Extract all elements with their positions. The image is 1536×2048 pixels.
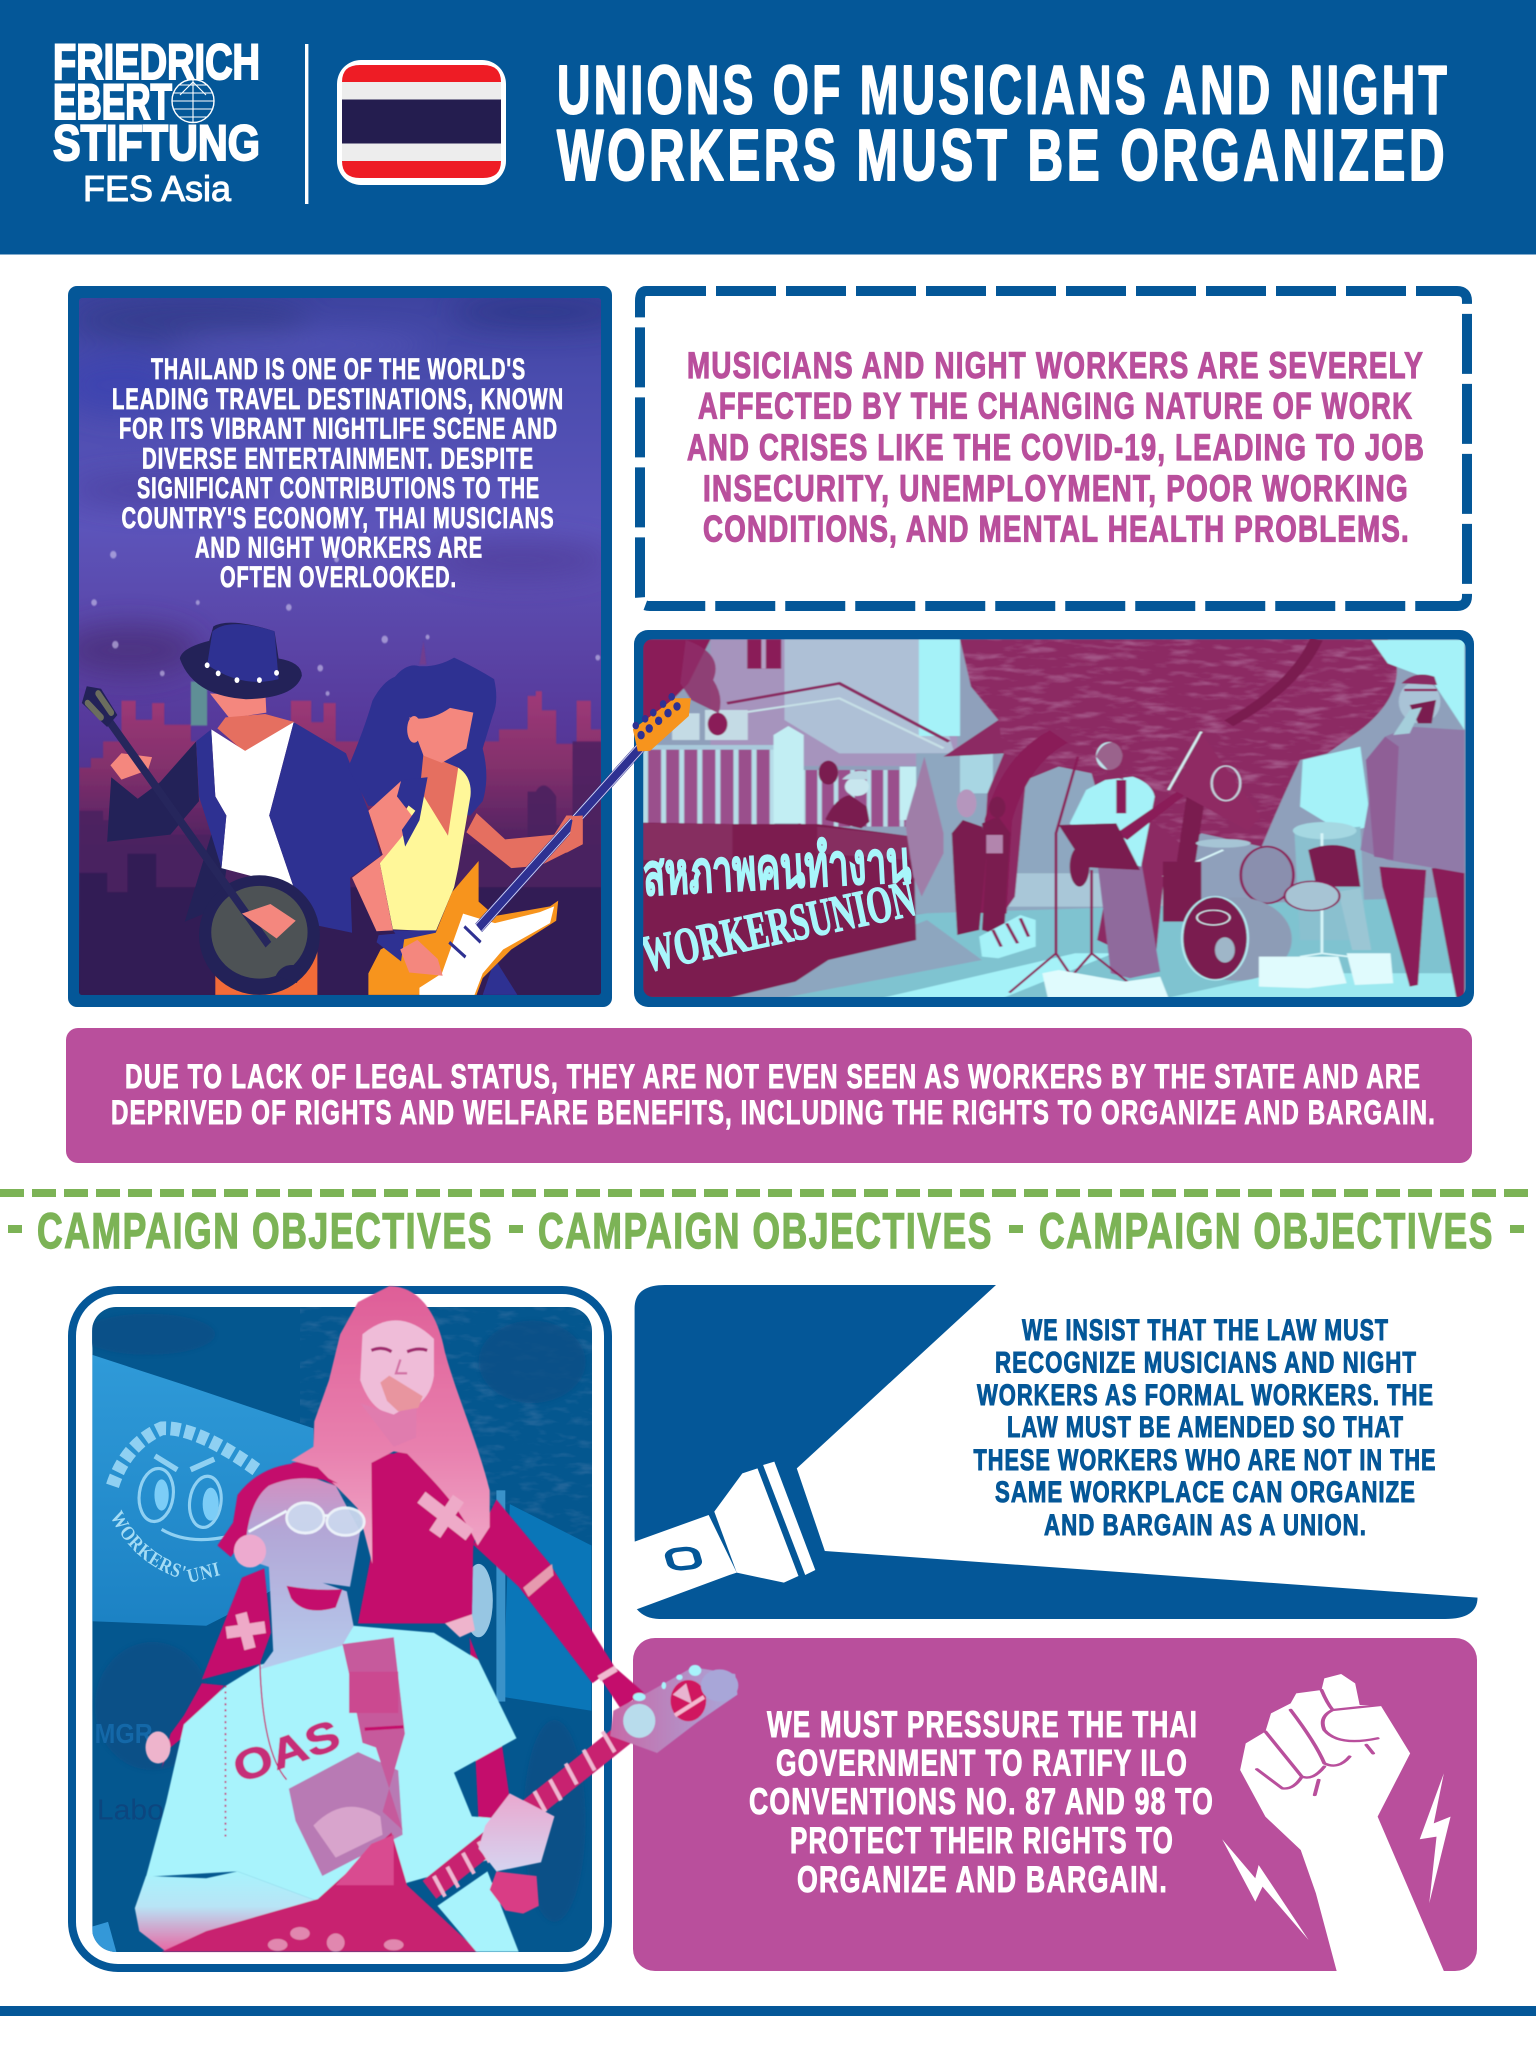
objective text: legal recognition	[974, 1314, 1436, 1542]
intro text: DIVERSE ENTERTAINMENT. DESPITE	[142, 442, 534, 476]
night city skyline	[79, 641, 601, 995]
banjo player	[82, 623, 381, 995]
tree canopy	[944, 639, 1397, 967]
objective text: ILO conventions: CONVENTIONS NO. 87 AND 98 TO	[749, 1781, 1214, 1822]
electric guitar	[162, 1665, 738, 1952]
banner lettering from the photo: WORKERSUNION	[637, 870, 920, 984]
panel: raised fist objective	[633, 1638, 1477, 1971]
intro text	[112, 353, 564, 594]
tree glimpse of sky	[1295, 640, 1465, 940]
logo: Friedrich Ebert Stiftung FES Asia: STIFTUNG	[53, 115, 260, 171]
guitar headstock overlapping the photo	[476, 693, 691, 931]
header divider	[305, 44, 308, 204]
green dashed rule	[0, 1189, 1536, 1197]
intro text: AND NIGHT WORKERS ARE	[195, 532, 483, 564]
icon: raised fist with lightning	[1222, 1674, 1451, 1971]
guitarist: OAS	[227, 1710, 346, 1792]
objective text: legal recognition: WE INSIST THAT THE LAW MUST	[1022, 1314, 1389, 1347]
objective text: ILO conventions: PROTECT THEIR RIGHTS TO	[790, 1820, 1174, 1861]
drum kit	[1042, 822, 1393, 998]
heading: campaign objectives: CAMPAIGN OBJECTIVES	[538, 1203, 993, 1259]
intro text: FOR ITS VIBRANT NIGHTLIFE SCENE AND	[119, 412, 558, 446]
secondary flag and pole	[464, 1490, 591, 1711]
panel: musicians illustration with intro text	[60, 286, 630, 1007]
logo: Friedrich Ebert Stiftung FES Asia: EBERT	[53, 74, 172, 130]
stars	[91, 551, 600, 696]
iron fence	[643, 726, 919, 827]
icon: Thai flag	[337, 60, 506, 185]
heading: campaign objectives: CAMPAIGN OBJECTIVES	[37, 1203, 493, 1259]
panel: framed photo of musician and protester: MGR	[95, 1718, 153, 1749]
panel: protest band photo	[634, 630, 1474, 1007]
intro text: THAILAND IS ONE OF THE WORLD'S	[151, 353, 526, 386]
header band	[0, 0, 1536, 254]
objective text: ILO conventions: ORGANIZE AND BARGAIN.	[797, 1859, 1168, 1900]
objective text: legal recognition: LAW MUST BE AMENDED SO THAT	[1007, 1411, 1404, 1444]
guitarist	[135, 1463, 516, 1952]
people by the fence	[819, 757, 1036, 958]
panel: framed photo of musician and protester	[68, 1286, 612, 1972]
guitarist	[348, 658, 583, 995]
banner lettering from the photo	[643, 836, 916, 972]
intro text: COUNTRY'S ECONOMY, THAI MUSICIANS	[122, 502, 554, 535]
objective text: ILO conventions: GOVERNMENT TO RATIFY ILO	[776, 1742, 1188, 1784]
callout text	[687, 345, 1425, 550]
building and sky	[643, 639, 960, 766]
logo: Friedrich Ebert Stiftung FES Asia: FRIEDRICH	[53, 34, 260, 90]
singer with microphone	[1360, 674, 1465, 998]
intro text: LEADING TRAVEL DESTINATIONS, KNOWN	[112, 383, 564, 416]
protester	[202, 1286, 644, 1830]
panel: framed photo of musician and protester: Labo	[97, 1794, 164, 1826]
logo: Friedrich Ebert Stiftung FES Asia	[53, 34, 260, 209]
panel: dashed callout on working conditions	[640, 291, 1467, 606]
microphone held by protester	[146, 1683, 224, 1768]
red union flag	[1166, 730, 1258, 816]
panel: flashlight objective	[631, 1285, 1478, 1619]
banner lettering from the photo: สหภาพคนทำงาน	[641, 829, 913, 908]
heading: campaign objectives	[8, 1203, 1524, 1259]
intro text: OFTEN OVERLOOKED.	[220, 561, 457, 594]
union flag with smiley logo: WORKERS' UNI	[112, 1510, 220, 1582]
flashlight beam icon	[631, 1285, 1478, 1619]
guitarist and music stand	[1009, 742, 1185, 993]
objective text: ILO conventions	[749, 1704, 1214, 1900]
title	[557, 52, 1450, 196]
objective text: ILO conventions: WE MUST PRESSURE THE THAI	[767, 1704, 1198, 1745]
bottom rule	[0, 2006, 1536, 2016]
logo: Friedrich Ebert Stiftung FES Asia: FES Asia	[83, 168, 232, 209]
objective text: legal recognition: AND BARGAIN AS A UNION.	[1044, 1509, 1367, 1542]
banner Workers Union	[643, 823, 916, 998]
union flag with smiley logo	[92, 1355, 314, 1626]
banner: lack of legal status	[66, 1028, 1472, 1163]
cutout: protester with taped mouth and guitarist overlapping frame	[135, 1286, 738, 1952]
mid-ground wall and road	[643, 753, 1465, 998]
intro text: SIGNIFICANT CONTRIBUTIONS TO THE	[137, 472, 540, 505]
